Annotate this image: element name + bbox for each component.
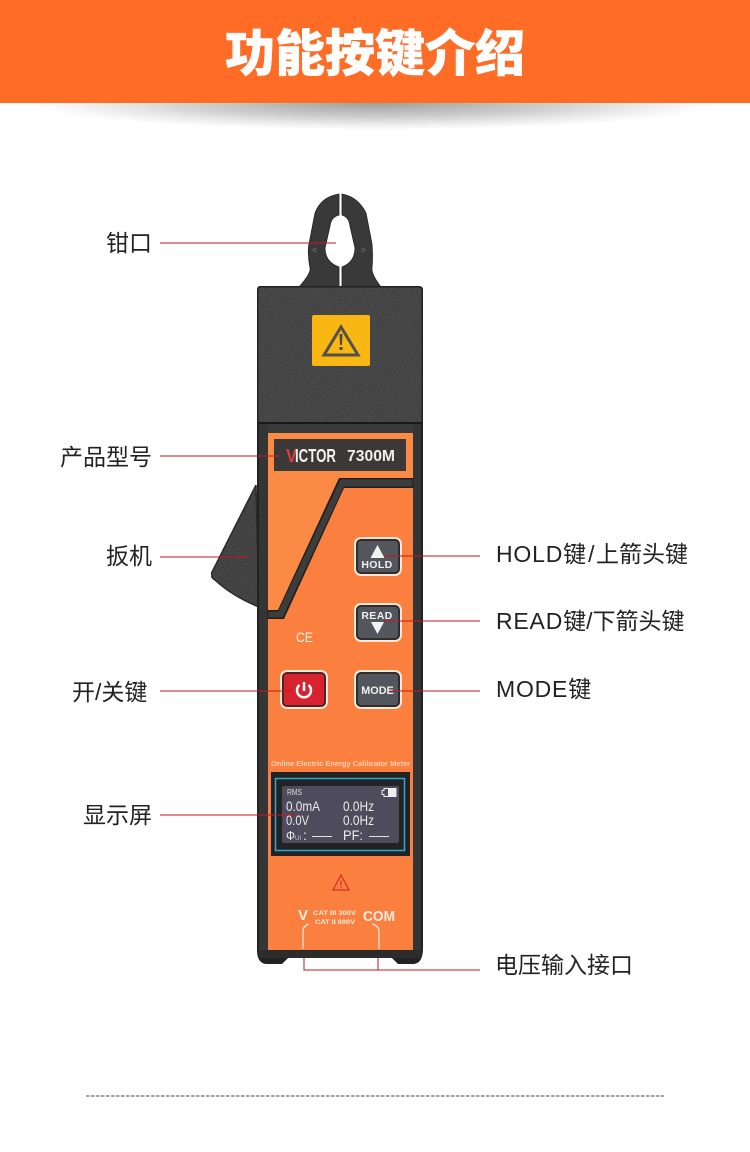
product name: Online Electric Energy Calibrator Meter	[271, 761, 410, 768]
power button	[281, 671, 327, 708]
display	[271, 772, 410, 856]
label: jaw: 钳口	[106, 230, 152, 256]
label: display: 显示屏	[83, 802, 152, 828]
CE mark: CE	[296, 629, 313, 645]
display: PF:	[343, 827, 363, 843]
display: 0.0V	[286, 812, 310, 828]
title: 功能按键介绍	[225, 26, 525, 82]
READ button	[355, 604, 401, 641]
label: trigger: 扳机	[106, 543, 152, 569]
label: HOLD key: HOLD键/上箭头键	[496, 541, 688, 567]
label: READ key: READ键/下箭头键	[496, 608, 684, 634]
orange panel: bottom	[268, 488, 413, 950]
header shadow	[63, 103, 687, 128]
header banner	[0, 0, 750, 103]
terminal labels: V	[298, 907, 308, 924]
trigger	[211, 485, 259, 607]
display: RMS	[287, 787, 302, 797]
model badge: ICTOR	[295, 446, 336, 466]
terminal labels	[298, 907, 395, 949]
warning label	[312, 315, 370, 366]
MODE button: MODE	[361, 685, 394, 697]
label: power key: 开/关键	[72, 679, 147, 705]
model badge: 7300M	[347, 448, 395, 465]
HOLD button	[355, 538, 401, 575]
model badge: V	[286, 446, 297, 466]
display: UI	[295, 836, 301, 842]
display: 0.0Hz	[343, 798, 374, 814]
label: voltage input: 电压输入接口	[495, 952, 633, 978]
READ button: READ	[361, 610, 393, 622]
label: model: 产品型号	[60, 444, 152, 470]
label: MODE key: MODE键	[496, 676, 591, 702]
terminal labels: CAT III 300V	[313, 910, 357, 917]
dashed footer line	[86, 1096, 664, 1097]
HOLD button: HOLD	[361, 559, 393, 571]
display: :	[303, 827, 307, 843]
display: 0.0Hz	[343, 812, 374, 828]
warning triangle	[333, 875, 349, 890]
display: –––	[312, 827, 332, 843]
terminal labels: CAT II 600V	[315, 919, 355, 926]
meter body	[257, 286, 423, 964]
clamp jaws	[299, 194, 381, 287]
display: –––	[369, 827, 389, 843]
terminal labels: COM	[363, 908, 395, 925]
orange panel: top	[268, 433, 413, 610]
upper casing	[258, 288, 422, 422]
display: 0.0mA	[286, 798, 321, 814]
diagonal groove	[268, 479, 413, 618]
MODE button	[355, 671, 401, 708]
display: Φ	[286, 828, 295, 843]
model badge	[274, 439, 406, 471]
